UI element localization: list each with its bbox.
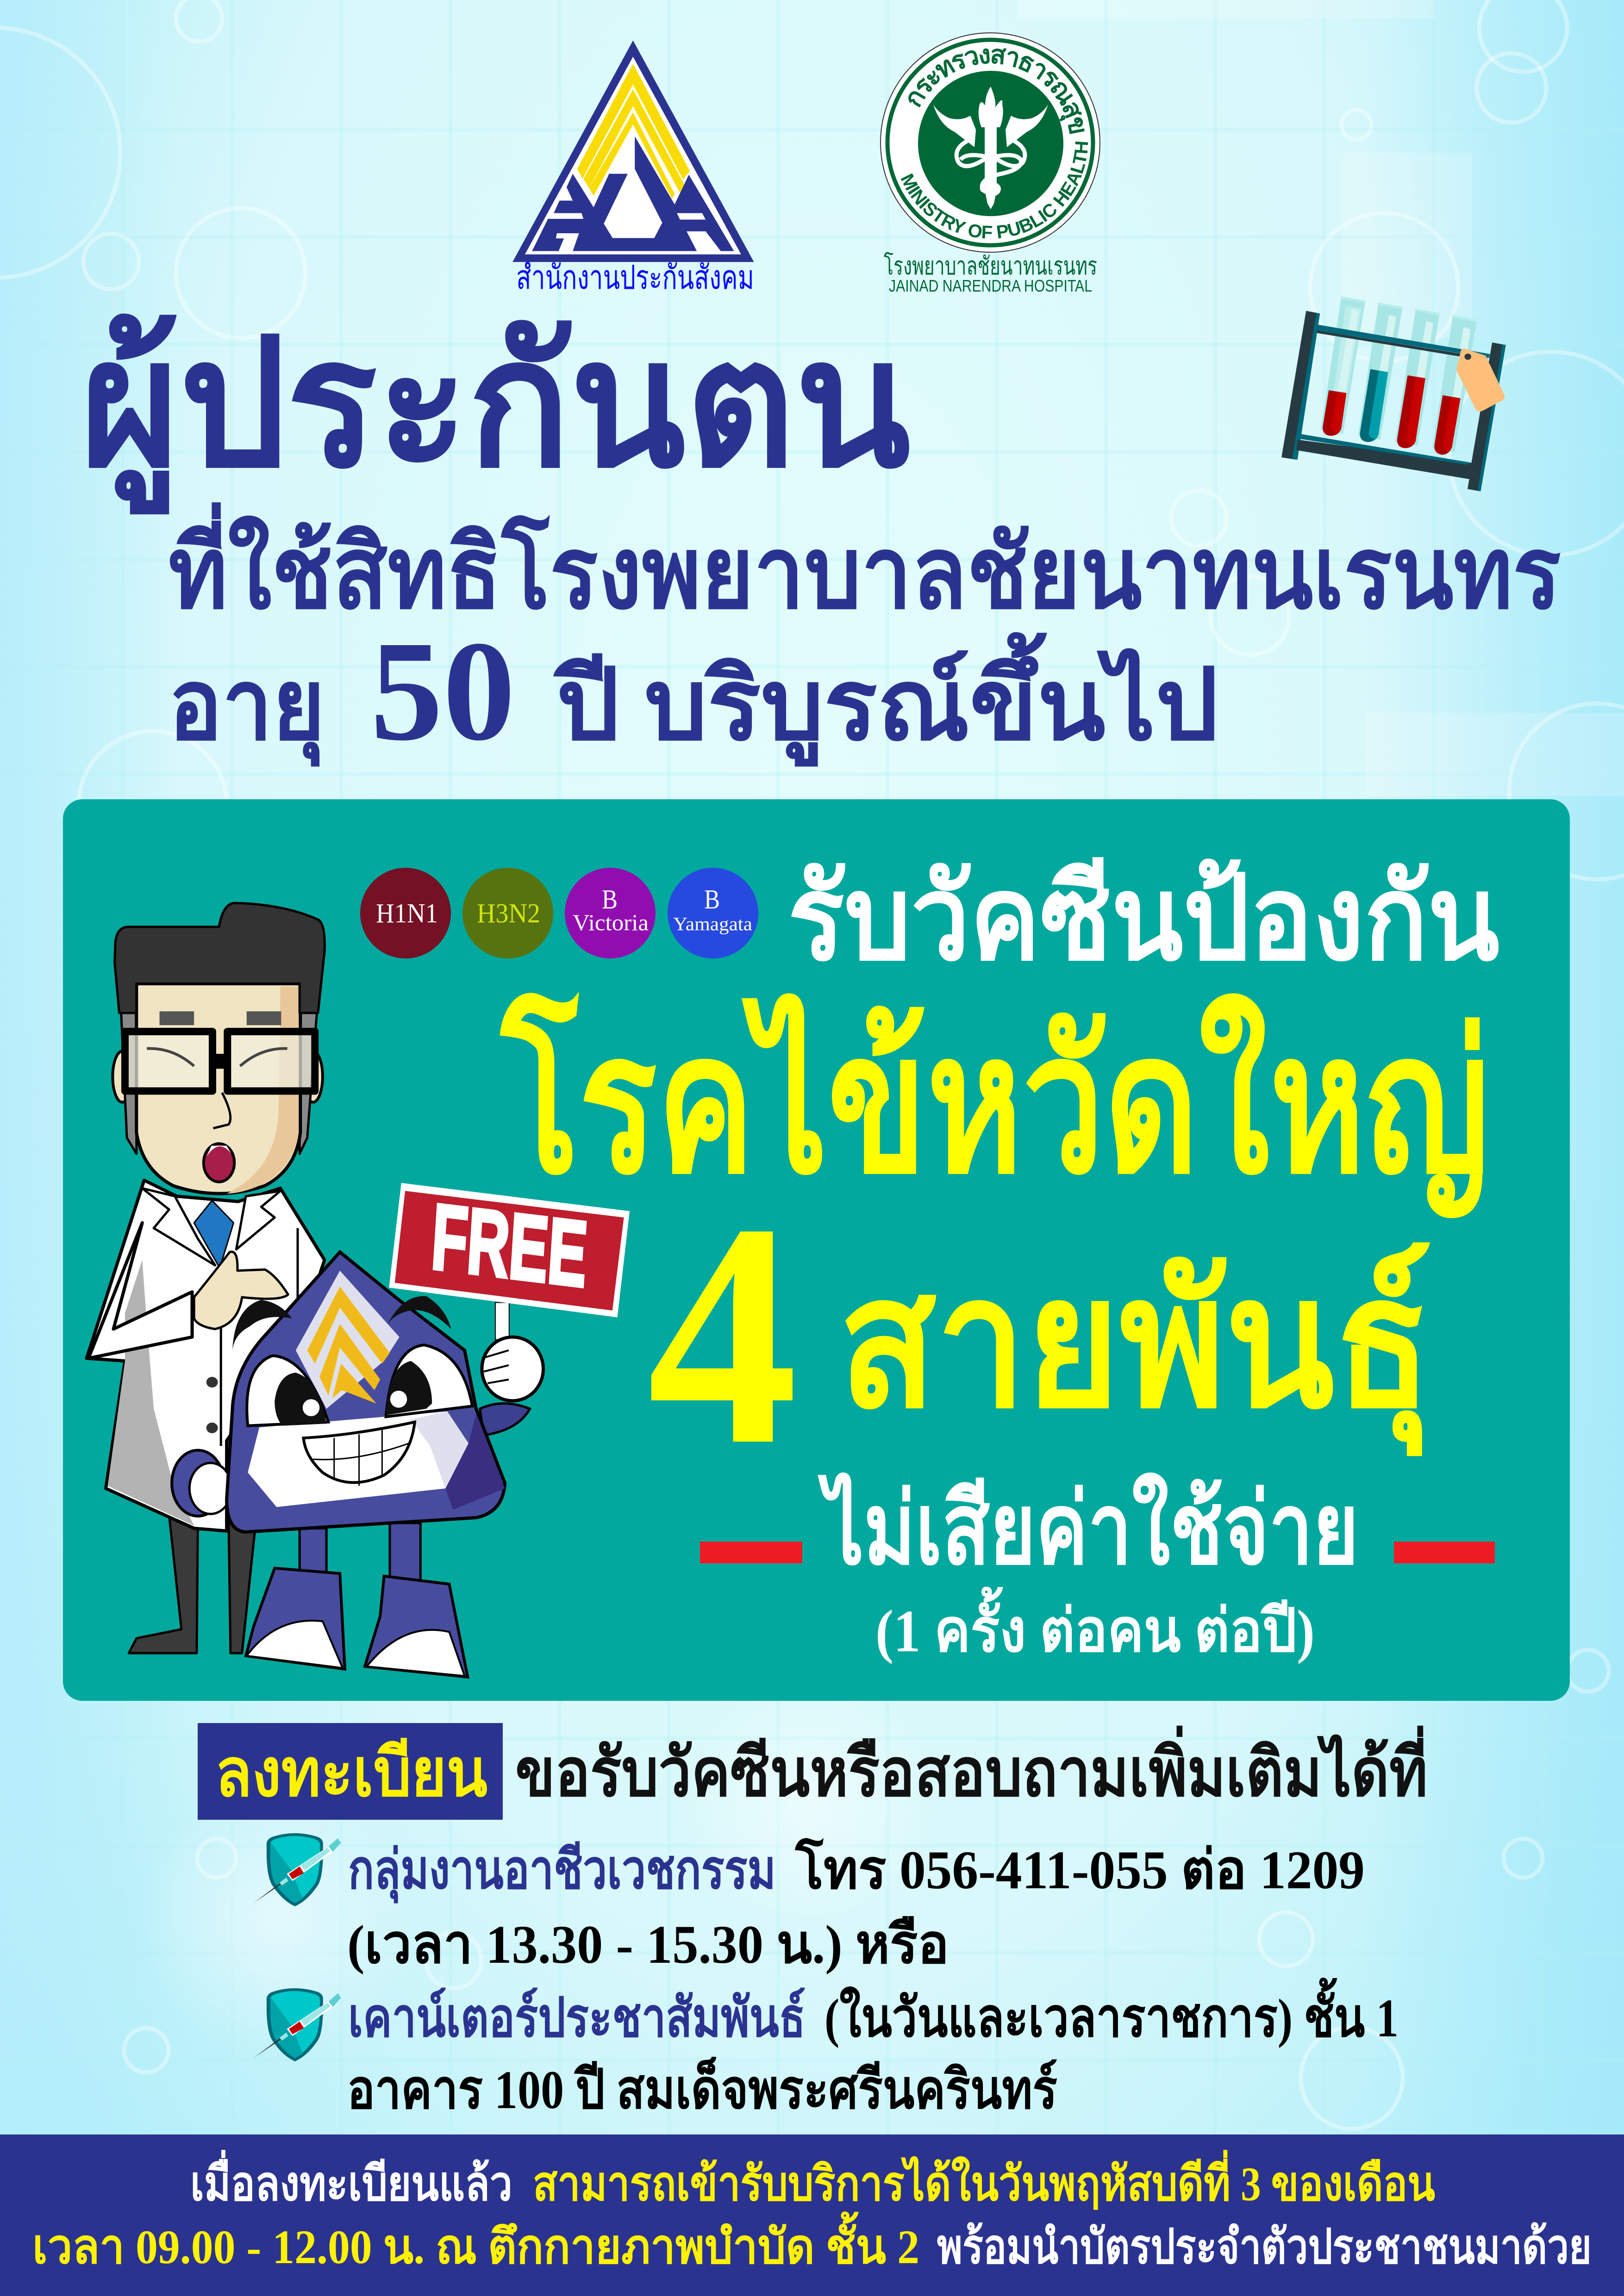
- register heading: [198, 1723, 1428, 1820]
- contact: occupational medicine: โทร 056-411-055 ต่อ 1209: [795, 1838, 1365, 1900]
- mascot: [172, 1252, 543, 1677]
- title: อายุ: [169, 650, 325, 767]
- strain badges: Victoria: [573, 909, 649, 935]
- logo caption: hospital: [884, 252, 1097, 295]
- contact: occupational medicine: [347, 1838, 1365, 1975]
- icon: shield with syringe: [254, 1833, 341, 1906]
- contact: public relations counter: เคาน์เตอร์ประชาสัมพันธ์: [348, 1987, 806, 2048]
- title: [81, 307, 1561, 771]
- register heading: ลงทะเบียน: [215, 1736, 487, 1811]
- contact: public relations counter: [347, 1978, 1399, 2120]
- register heading: ขอรับวัคซีนหรือสอบถามเพิ่มเติมได้ที่: [515, 1725, 1428, 1811]
- footer band: สามารถเข้ารับบริการได้ในวันพฤหัสบดีที่ 3 ของเดือน: [533, 2150, 1435, 2211]
- strain badges: H1N1: [376, 898, 438, 928]
- logo: ministry of public health: [881, 33, 1100, 252]
- strain badges: Yamagata: [673, 913, 752, 934]
- logo caption: hospital: โรงพยาบาลชัยนาทนเรนทร: [884, 252, 1097, 280]
- contact: occupational medicine: (เวลา 13.30 - 15.30 น.) หรือ: [347, 1914, 949, 1975]
- icon: test tube rack: [1281, 296, 1506, 492]
- logo: ministry of public health: MINISTRY OF PUBLIC HEALTH: [896, 140, 1092, 243]
- logo: social security office: [512, 40, 754, 296]
- contact: public relations counter: อาคาร 100 ปี สมเด็จพระศรีนครินทร์: [347, 2056, 1057, 2120]
- contact: occupational medicine: กลุ่มงานอาชีวเวชกรรม: [348, 1840, 776, 1904]
- title: ปี บริบูรณ์ขึ้นไป: [553, 632, 1218, 767]
- free of charge: ไม่เสียค่าใช้จ่าย: [818, 1472, 1359, 1585]
- strain badges: [360, 868, 758, 958]
- footer band: เวลา 09.00 - 12.00 น. ณ ตึกกายภาพบำบัด ชั้น 2: [32, 2211, 919, 2274]
- illustration: doctor and mascot: [87, 903, 630, 1677]
- footer band: [0, 2134, 1624, 2296]
- logo caption: สำนักงานประกันสังคม: [516, 259, 754, 296]
- icon: shield with syringe: [254, 1988, 341, 2061]
- strain badges: B: [704, 884, 720, 915]
- headline: vaccine: รับวัคซีนป้องกัน: [788, 854, 1499, 985]
- sign: free: FREE: [429, 1184, 590, 1307]
- footer band: เมื่อลงทะเบียนแล้ว: [190, 2150, 512, 2211]
- caduceus emblem: [933, 87, 1048, 209]
- logo caption: hospital: JAINAD NARENDRA HOSPITAL: [889, 276, 1092, 295]
- panel: vaccine offer: [63, 799, 1570, 1701]
- strain badges: H3N2: [477, 898, 540, 928]
- title: 50: [370, 612, 515, 771]
- strain badges: B: [602, 884, 618, 915]
- doctor: [87, 903, 325, 1653]
- headline: strains: สายพันธุ์: [839, 1240, 1432, 1457]
- contact: public relations counter: (ในวันและเวลาราชการ) ชั้น 1: [824, 1978, 1399, 2048]
- title: ผู้ประกันตน: [81, 307, 911, 515]
- note: once per person per year: (1 ครั้ง ต่อคน ต่อปี): [875, 1586, 1315, 1665]
- logo: ministry of public health: กระทรวงสาธารณสุข: [898, 39, 1093, 137]
- sign: free: [389, 1183, 630, 1340]
- number 4: 4: [647, 1157, 798, 1511]
